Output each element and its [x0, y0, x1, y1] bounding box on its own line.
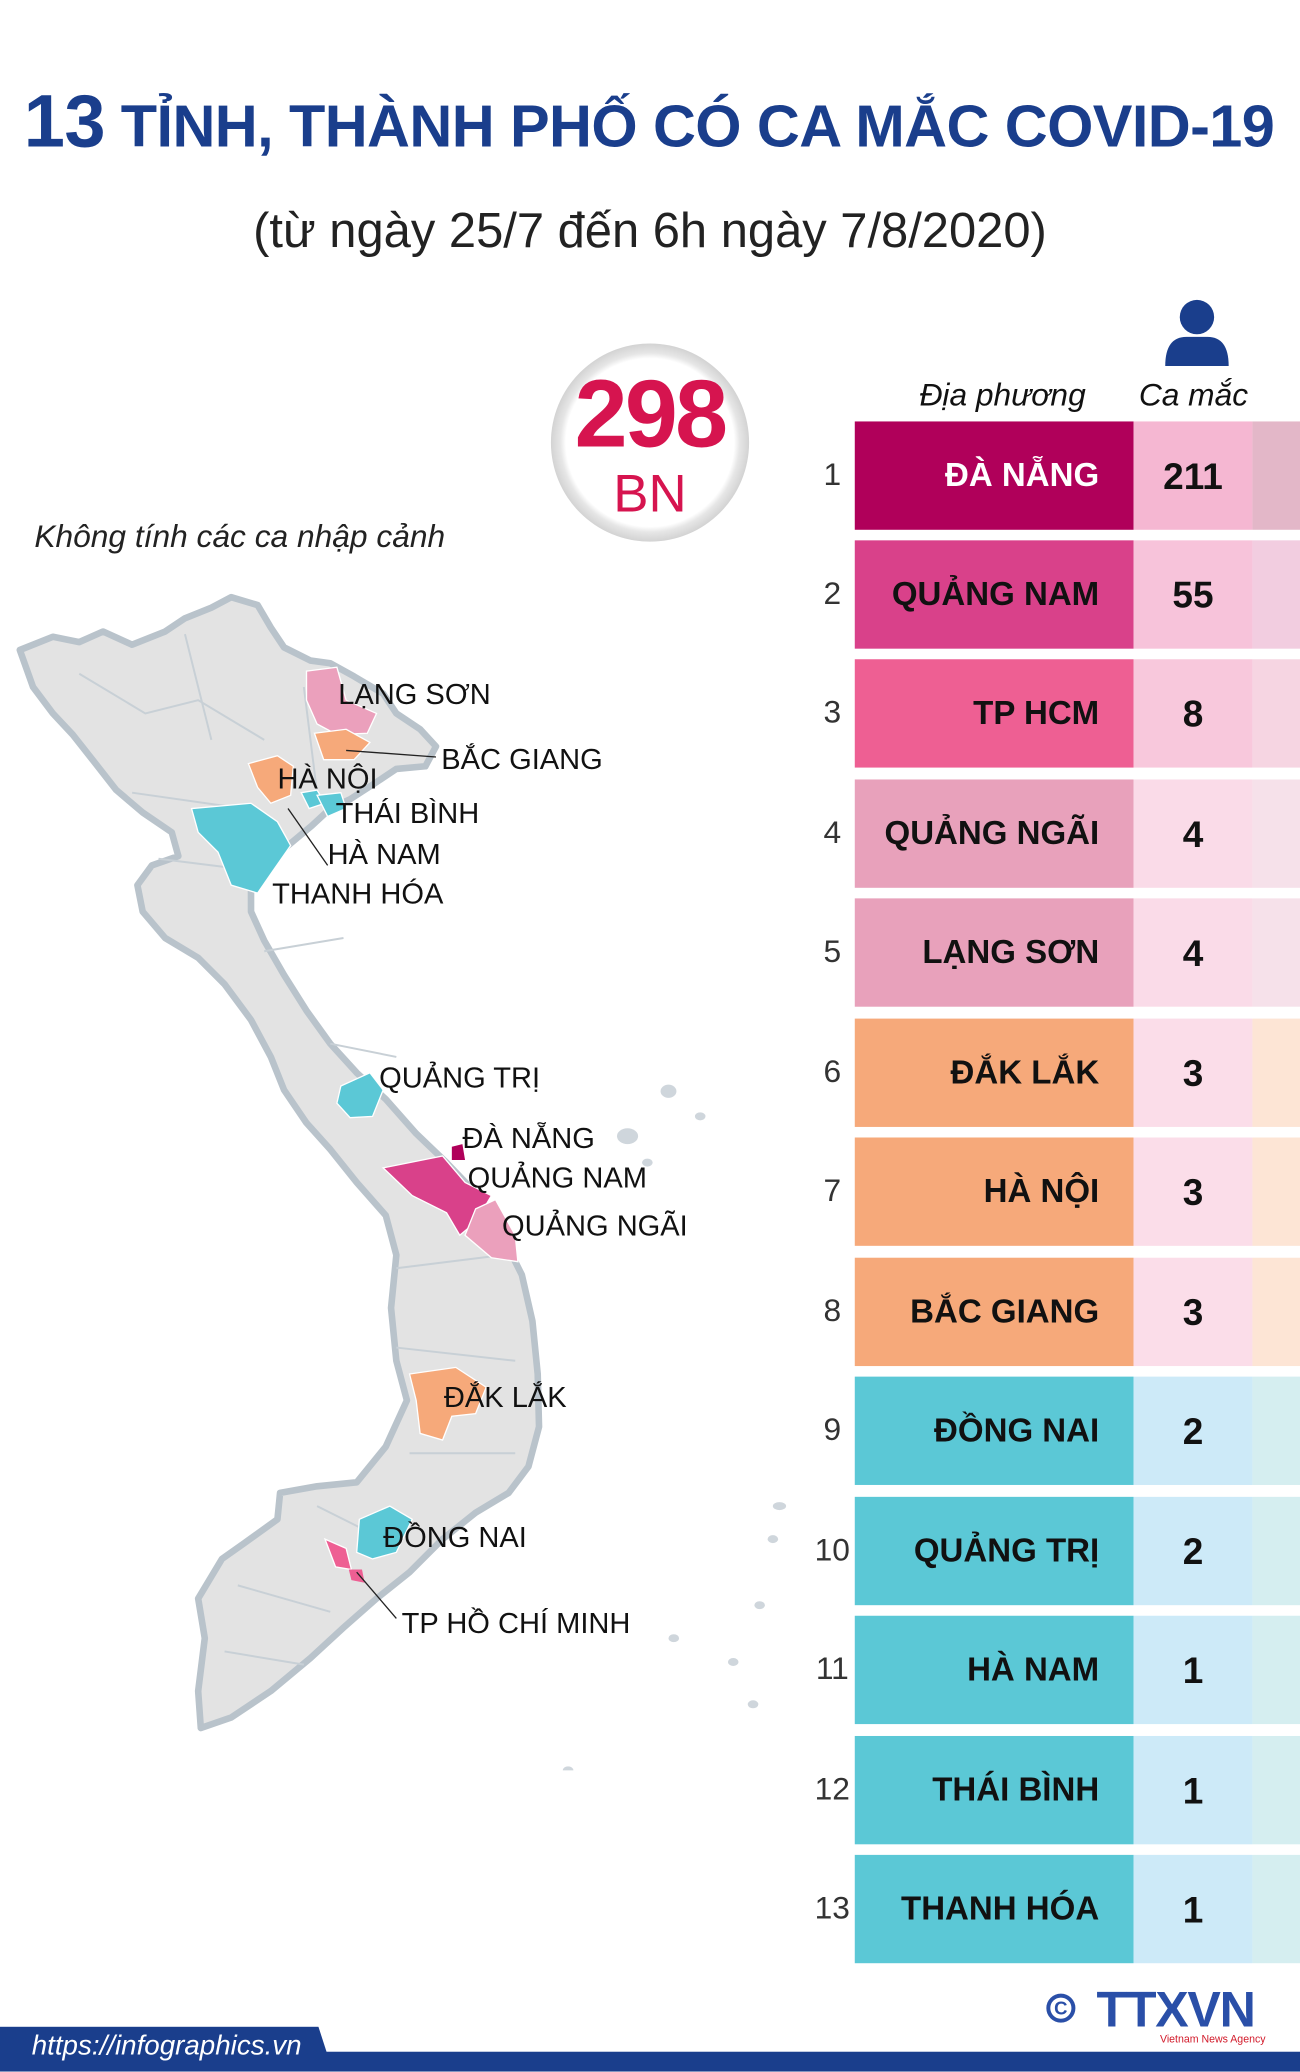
row 3: 8 [1183, 694, 1203, 735]
text: HÀ NỘI [277, 762, 378, 795]
text: Ca mắc [1139, 378, 1248, 414]
text: ĐỒNG NAI [383, 1521, 527, 1554]
row 13 [815, 1854, 1300, 1964]
row 1: 211 [1163, 456, 1223, 497]
row 11 [816, 1616, 1300, 1724]
row 11: 11 [816, 1651, 849, 1687]
text: THANH HÓA [272, 877, 443, 910]
provinces [307, 667, 377, 735]
footer bar [0, 2052, 1300, 2072]
row 3: 3 [823, 695, 841, 731]
text: ĐÀ NẴNG [462, 1122, 595, 1155]
text: ĐẮK LẮK [444, 1381, 567, 1414]
row 10 [815, 1496, 1300, 1606]
row 6: ĐẮK LẮK [951, 1054, 1099, 1091]
row 4: 4 [823, 815, 841, 851]
row 1: ĐÀ NẴNG [945, 457, 1099, 494]
title: 13 TỈNH, THÀNH PHỐ CÓ CA MẮC COVID-19 [24, 79, 1274, 163]
table header: Địa phương [920, 378, 1086, 414]
text: TP HỒ CHÍ MINH [402, 1607, 630, 1640]
row 12: THÁI BÌNH [932, 1772, 1099, 1809]
row 6: 3 [1183, 1053, 1203, 1094]
row 5: LẠNG SƠN [922, 934, 1099, 971]
row 4: 4 [1183, 814, 1203, 855]
row 8: 3 [1183, 1292, 1203, 1333]
text: BẮC GIANG [441, 742, 603, 776]
table: cases by province [815, 421, 1300, 1964]
row 3 [823, 659, 1300, 768]
logo: TTXVN: Vietnam News Agency [1160, 2033, 1266, 2045]
total badge: 298 BN: BN [613, 465, 687, 523]
logo: TTXVN: C [1054, 1998, 1068, 2019]
row 9: 2 [1183, 1411, 1203, 1452]
row 13: 1 [1183, 1889, 1203, 1930]
row 9 [823, 1376, 1300, 1485]
row 8: BẮC GIANG [910, 1293, 1099, 1330]
row 1 [823, 421, 1300, 530]
row 10: 2 [1183, 1531, 1203, 1572]
total badge: 298 BN [551, 343, 749, 542]
text: QUẢNG NAM [468, 1161, 647, 1194]
row 5: 4 [1183, 933, 1203, 974]
row 5: 5 [823, 934, 841, 970]
row 2: 2 [823, 576, 841, 612]
logo: TTXVN: TTXVN [1097, 1983, 1255, 2039]
text: HÀ NAM [328, 838, 441, 871]
total badge: 298 BN: 298 [575, 362, 725, 468]
row 11: HÀ NAM [967, 1651, 1099, 1688]
text: QUẢNG TRỊ [379, 1061, 540, 1094]
row 10: QUẢNG TRỊ [914, 1533, 1099, 1570]
row 13: THANH HÓA [901, 1891, 1099, 1928]
row 6: 6 [823, 1054, 841, 1090]
row 10: 10 [815, 1533, 850, 1568]
text: QUẢNG NGÃI [502, 1209, 688, 1242]
row 1: 1 [823, 457, 841, 493]
subtitle: (từ ngày 25/7 đến 6h ngày 7/8/2020) [253, 203, 1047, 258]
row 12: 1 [1183, 1770, 1203, 1811]
row 12: 12 [815, 1772, 850, 1807]
row 6 [823, 1018, 1300, 1127]
footer url tab: https://infographics.vn [32, 2031, 302, 2061]
row 7: 3 [1183, 1172, 1203, 1213]
logo: TTXVN [1046, 1983, 1266, 2045]
row 2: QUẢNG NAM [892, 576, 1099, 613]
map labels: LẠNG SƠN [338, 678, 491, 711]
row 4: QUẢNG NGÃI [885, 815, 1099, 852]
row 13: 13 [815, 1891, 850, 1926]
row 5 [823, 898, 1300, 1007]
row 7: HÀ NỘI [984, 1173, 1099, 1210]
text: THÁI BÌNH [336, 797, 479, 830]
row 3: TP HCM [973, 695, 1099, 732]
note: Không tính các ca nhập cảnh [34, 519, 445, 555]
row 11: 1 [1183, 1650, 1203, 1691]
row 8: 8 [823, 1293, 841, 1329]
row 2: 55 [1172, 575, 1214, 616]
row 9: 9 [823, 1412, 841, 1448]
row 9: ĐỒNG NAI [934, 1412, 1099, 1449]
row 7: 7 [823, 1173, 841, 1209]
row 4 [823, 780, 1300, 888]
map of Vietnam [16, 594, 786, 1770]
row 7 [823, 1138, 1300, 1246]
row 8 [823, 1258, 1300, 1366]
row 12 [815, 1736, 1300, 1844]
row 2 [823, 540, 1300, 649]
icon: person [1165, 300, 1229, 366]
